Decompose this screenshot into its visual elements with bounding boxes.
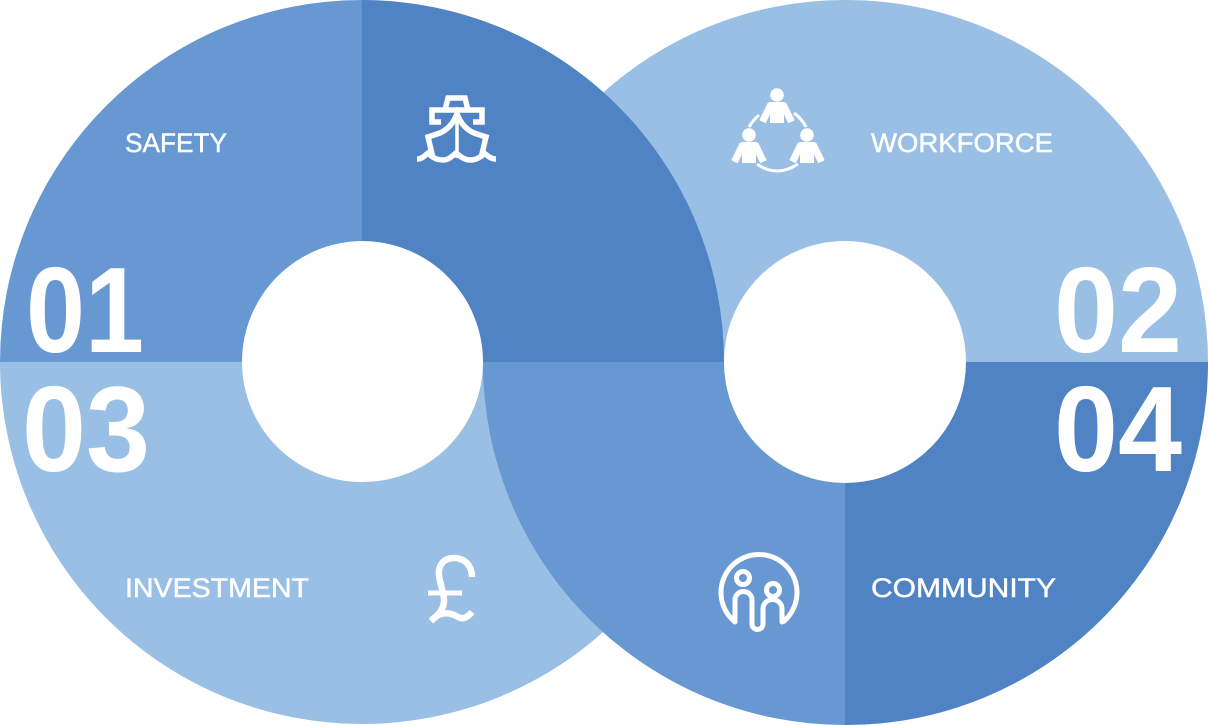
icon: ship xyxy=(417,98,496,160)
heading: workforce: WORKFORCE xyxy=(871,128,1053,158)
icon: pound sign xyxy=(428,558,472,621)
panel: investment quadrant xyxy=(0,362,724,724)
panel: community icon quadrant xyxy=(483,362,845,725)
panel: community quadrant xyxy=(845,362,1208,725)
icon: family in circle xyxy=(721,555,797,630)
heading: community: COMMUNITY xyxy=(871,573,1056,603)
number 01: 01 xyxy=(26,242,144,378)
number 02: 02 xyxy=(1054,242,1182,378)
icon: workforce circle xyxy=(732,88,824,171)
panel: workforce quadrant xyxy=(845,0,1208,362)
panel: safety icon quadrant xyxy=(362,0,724,362)
heading: safety: SAFETY xyxy=(125,128,227,158)
heading: investment: INVESTMENT xyxy=(125,573,309,603)
panel: safety quadrant xyxy=(0,0,362,362)
panel: workforce left ring segment xyxy=(483,0,845,362)
number 03: 03 xyxy=(22,361,150,497)
number 04: 04 xyxy=(1054,361,1182,497)
